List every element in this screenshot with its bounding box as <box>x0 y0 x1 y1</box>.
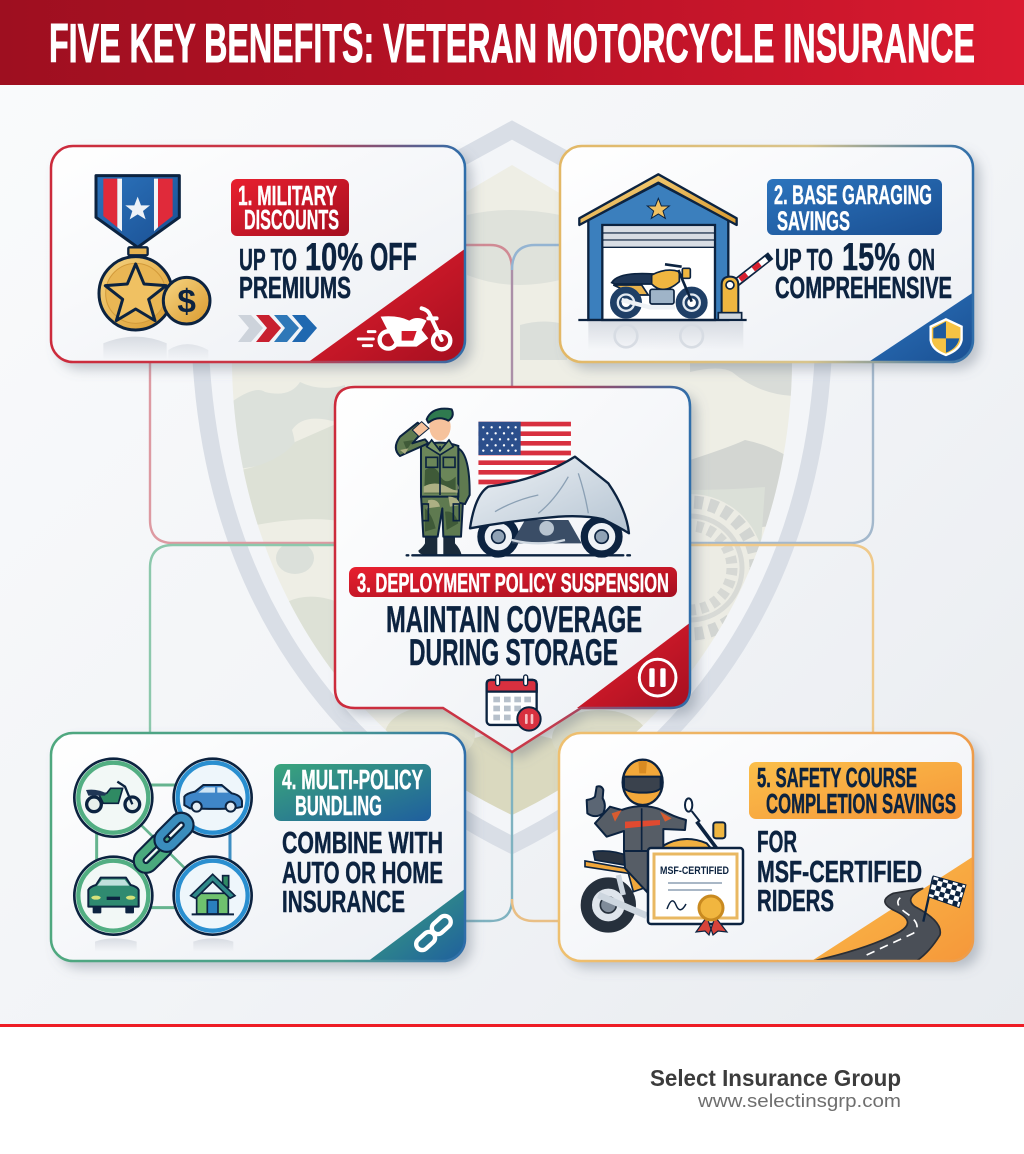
panel: 4 multi-policy bundling <box>51 733 466 962</box>
corner triangle with pause symbol <box>577 622 691 709</box>
label badge: DISCOUNTS <box>244 204 339 235</box>
benefit text: 10% <box>305 236 363 279</box>
benefit text: ON <box>908 242 935 277</box>
corner triangle with motorcycle <box>307 248 466 363</box>
circle: car <box>174 759 252 837</box>
certificate <box>648 848 743 935</box>
header banner <box>0 0 1024 85</box>
icon: garage with motorcycle and barrier <box>578 174 767 350</box>
footer divider <box>0 1024 1024 1027</box>
icon: chevron arrows <box>238 315 317 342</box>
corner triangle with shield <box>867 292 974 363</box>
benefit text: INSURANCE <box>282 884 405 919</box>
icon: saluting soldier <box>396 409 470 555</box>
benefit text: MAINTAIN COVERAGE <box>386 599 642 640</box>
label badge <box>749 762 962 819</box>
benefit text <box>239 236 417 305</box>
benefit text: UP TO <box>239 242 297 277</box>
icon: calendar with pause badge <box>487 675 541 731</box>
benefit text <box>282 825 443 919</box>
benefit text: MSF-CERTIFIED <box>757 854 922 889</box>
benefit text: RIDERS <box>757 883 834 918</box>
icon: rider on motorcycle with certificate <box>585 760 725 927</box>
background: faint shield with camouflage and tire <box>201 130 823 845</box>
benefit text: DURING STORAGE <box>409 632 618 673</box>
benefit text: AUTO OR HOME <box>282 855 443 890</box>
benefit text: OFF <box>370 236 417 279</box>
label badge <box>274 764 431 821</box>
label badge: BUNDLING <box>295 790 382 821</box>
icon: medal with dollar coin: $ <box>177 284 196 321</box>
footer: company name and website: Select Insurance Group <box>650 1065 901 1091</box>
corner triangle with link <box>367 888 466 962</box>
label badge: 1. MILITARY <box>238 180 337 211</box>
icon: covered motorcycle <box>407 457 630 555</box>
label badge: 4. MULTI-POLICY <box>282 764 423 795</box>
label badge <box>349 567 677 598</box>
circle: motorcycle <box>74 759 152 837</box>
benefit text: FOR <box>757 824 797 859</box>
benefit text: PREMIUMS <box>239 270 351 305</box>
panel: 3 deployment policy suspension <box>335 387 691 752</box>
connector lines between cards <box>150 245 873 921</box>
corner triangle with road and checkered flag <box>810 856 974 962</box>
chain link <box>136 815 192 871</box>
certificate: MSF-CERTIFIED <box>660 865 729 877</box>
circle: house <box>174 857 252 935</box>
benefit text: UP TO <box>775 242 833 277</box>
panel: 1 military discounts <box>51 146 466 363</box>
benefit text: COMBINE WITH <box>282 825 443 860</box>
panel: 5 safety course completion savings <box>559 733 974 962</box>
icon: American flag <box>478 422 571 485</box>
benefit text <box>775 236 952 305</box>
label badge: 5. SAFETY COURSE <box>757 762 917 793</box>
icon: bundled policies with chain link <box>74 759 252 952</box>
label badge: 3. DEPLOYMENT POLICY SUSPENSION <box>357 568 669 598</box>
benefit text <box>386 599 642 673</box>
label badge: SAVINGS <box>777 206 850 236</box>
icon: medal with dollar coin <box>96 176 210 360</box>
footer: company name and website <box>650 1065 901 1111</box>
circle: car front <box>74 857 152 935</box>
panel: 2 base garaging savings <box>560 146 974 363</box>
label badge <box>767 179 942 236</box>
footer: company name and website: www.selectinsgrp.com <box>697 1091 901 1111</box>
label badge <box>231 179 349 236</box>
benefit text: 15% <box>842 236 900 279</box>
benefit text <box>757 824 922 918</box>
